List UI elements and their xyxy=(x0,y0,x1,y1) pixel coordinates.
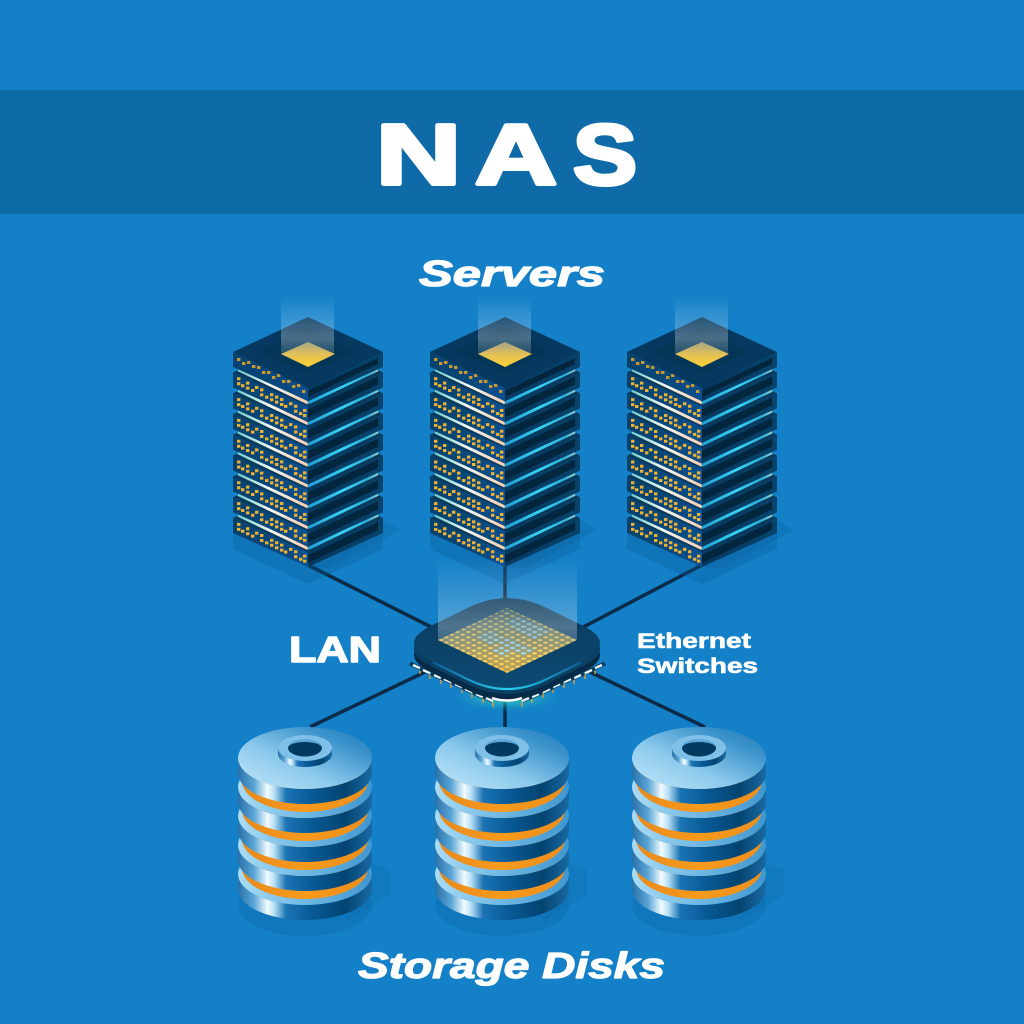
title xyxy=(376,108,637,203)
label: ethernet switches: Ethernet xyxy=(637,630,751,653)
heading: servers: Servers xyxy=(419,253,605,294)
server rack right xyxy=(627,295,794,584)
server rack center xyxy=(430,295,597,584)
connection lines xyxy=(308,565,705,727)
title: S xyxy=(573,108,637,203)
title: A xyxy=(475,108,557,203)
server rack left xyxy=(233,295,400,584)
ethernet switch chip xyxy=(410,558,605,713)
title: N xyxy=(376,108,461,203)
heading: storage disks: Storage Disks xyxy=(358,945,665,986)
label: ethernet switches: Switches xyxy=(637,655,758,678)
header band xyxy=(0,90,1024,214)
storage disk center xyxy=(435,727,587,936)
label: ethernet switches xyxy=(637,630,758,678)
storage disk left xyxy=(238,727,390,936)
label: LAN: LAN xyxy=(289,629,381,670)
storage disk right xyxy=(632,727,784,936)
